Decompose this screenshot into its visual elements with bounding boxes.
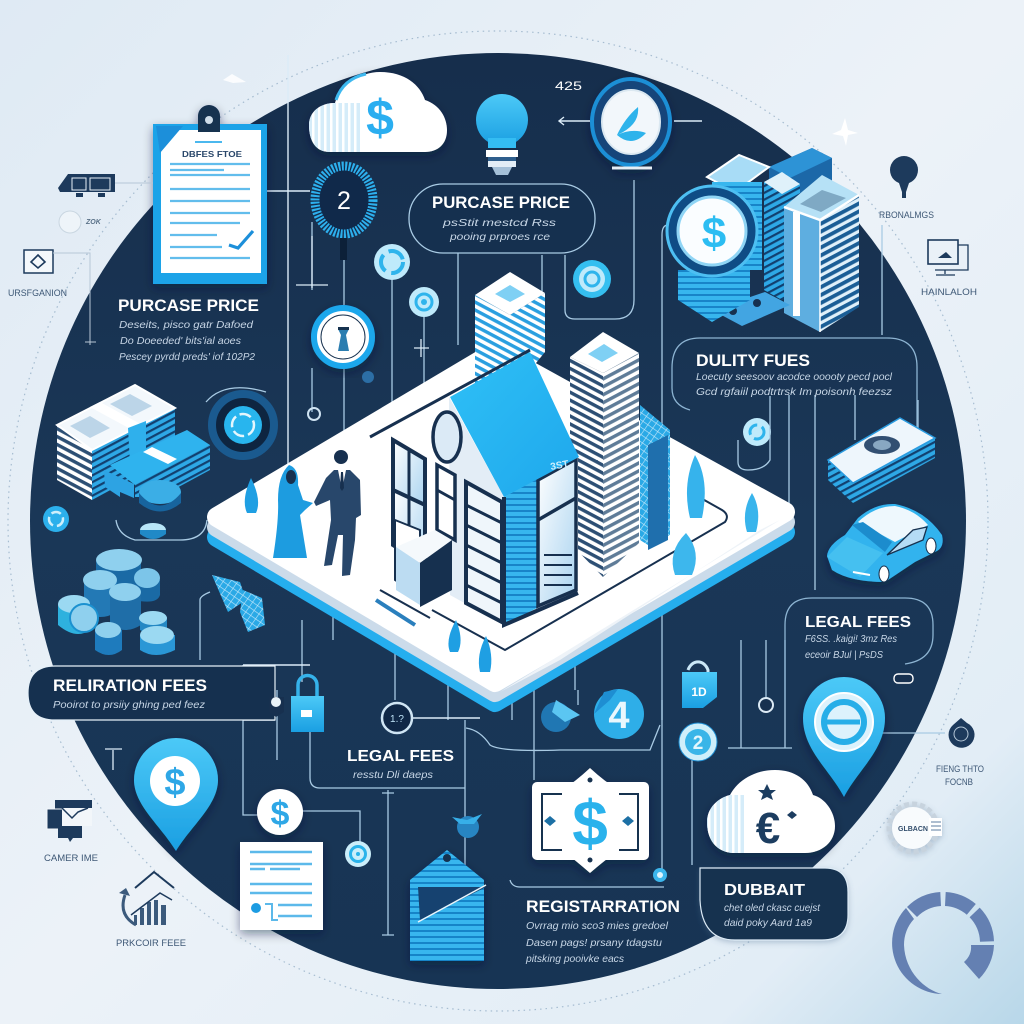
icon: dollar badge: $ [271, 795, 290, 833]
connector lines [116, 55, 945, 935]
text: dubai detail [724, 902, 821, 929]
icon: right clock tower cluster: $ [702, 209, 726, 258]
text: duty fees detail [696, 371, 893, 398]
text: clipboard title: DBFES FTOE [182, 149, 242, 159]
icon: blue map pin left with dollar [134, 738, 218, 851]
arrow: clock left [559, 117, 590, 125]
panel: duty fees [672, 338, 917, 436]
outside label: regionals: RBONALMGS [879, 210, 934, 221]
outside label: price fee: PRKCOIR FEEE [116, 938, 186, 949]
icon: padlock right: 1D [691, 685, 707, 699]
heading: purchase price left: PURCASE PRICE [118, 296, 259, 315]
outside icon: gear badge: GLBACN [898, 824, 928, 833]
icon: cloud with euro: € [756, 804, 780, 853]
icon: small capsule tag [894, 674, 913, 683]
text: relocation fees detail: Pooirot to prsiiy ghing ped feez [53, 699, 206, 711]
icon: woven tag [212, 575, 265, 632]
icon: ring target left [212, 394, 274, 456]
icon: teal badge far left [43, 506, 69, 532]
text: purchase price top detail: pooing prproes rce [449, 231, 550, 243]
heading: legal fees right: LEGAL FEES [805, 614, 911, 631]
icon: light bulb [476, 94, 528, 175]
text: dubai detail: chet oled ckasc cuejst [724, 902, 821, 914]
panel: dubai capsule [700, 868, 848, 940]
outside label: fieng thto focnb [936, 764, 984, 788]
text: legal fees bottom detail: resstu Dli daeps [353, 769, 434, 781]
people: man [314, 450, 361, 576]
icon: car [827, 504, 943, 582]
text: legal fees right detail: F6SS. .kaigi! 3mz Res [805, 633, 898, 645]
tower: front right [570, 332, 639, 577]
clock [667, 186, 757, 276]
label: 425: 425 [555, 79, 582, 93]
text: purchase price left detail [119, 319, 255, 363]
icon: target ring bottom [345, 841, 371, 867]
icon: orbit arc with sparkle [206, 388, 266, 402]
outside icon: dark bell pin [949, 718, 975, 748]
heading: duty fees: DULITY FUES [696, 351, 810, 370]
heading: relocation fees: RELIRATION FEES [53, 676, 207, 695]
icon: shield pin left [269, 697, 284, 717]
icon: banknote dollar center bottom [532, 768, 649, 873]
back building [707, 155, 769, 192]
icon: teal badge upper left [374, 244, 410, 280]
text: legal fees right detail [805, 633, 898, 661]
outside icon: plane left [223, 74, 246, 83]
platform base [217, 352, 785, 702]
icon: banknote stack right [828, 418, 935, 503]
outside label: camer ime: CAMER IME [44, 853, 98, 864]
icon: top clock [592, 79, 670, 168]
icon: padlock left [291, 676, 324, 732]
text: duty fees detail: Gcd rgfaiil podtrtrsk Im poisonh feezsz [696, 386, 893, 398]
line: clock right [674, 120, 702, 122]
icon: numbered ring 2 [315, 166, 373, 260]
icon: cloud with dollar [309, 72, 447, 152]
windows left upper [393, 440, 425, 565]
text: registration detail: Dasen pags! prsany tdagstu [526, 937, 662, 949]
icon: keyhole badge [314, 308, 372, 366]
icon: right clock tower cluster [667, 148, 859, 332]
base tiles [712, 292, 790, 326]
text: registration detail: Ovrrag mio sco3 mies gredoel [526, 920, 669, 932]
icon: cloud with dollar: $ [366, 90, 394, 146]
striped window block [466, 482, 502, 622]
gauge chart bottom right [892, 892, 994, 994]
icon: banknote dollar center bottom: $ [572, 787, 608, 859]
icon: number 2 badge [679, 723, 717, 761]
outside label: hainlaloh: HAINLALOH [921, 287, 977, 298]
heading: dubai: DUBBAIT [724, 882, 805, 899]
icon: small ring [759, 698, 773, 712]
mid tower [764, 172, 800, 300]
trees [245, 455, 758, 672]
text: legal fees right detail: eceoir BJul | PsDS [805, 649, 883, 661]
icon: numbered ring 2: 2 [337, 187, 351, 215]
icon: sparkle crosses [105, 236, 429, 770]
text: purchase price left detail: Pescey pyrdd preds' iof 102P2 [119, 351, 255, 363]
text: dubai detail: daid poky Aard 1a9 [724, 917, 812, 929]
outside label: organisation: URSFGANION [8, 288, 67, 299]
heading: legal fees bottom: LEGAL FEES [347, 748, 454, 765]
icon: blue map pin right [803, 677, 885, 797]
outside icon: globe and label: ZOK [85, 219, 102, 226]
roof tag: 3ST [550, 459, 570, 473]
tower: back left [475, 272, 545, 395]
striped base [678, 270, 750, 322]
icon: question badge: 1.? [390, 714, 404, 725]
outside label: fieng thto focnb: FOCNB [945, 777, 973, 788]
icon: cloud with euro [707, 770, 835, 853]
icon: blue tag folder [410, 850, 486, 961]
text: registration detail [525, 920, 669, 965]
text: registration detail: pitsking pooivke eacs [525, 953, 625, 965]
outside icon: bar chart tag left [47, 800, 92, 842]
panel: legal fees bottom [347, 748, 454, 781]
heading: purchase price top: PURCASE PRICE [432, 193, 570, 212]
outside label: fieng thto focnb: FIENG THTO [936, 764, 984, 775]
porch [395, 520, 420, 596]
icon: teal badge center right [573, 260, 611, 298]
icon: speaker badge [541, 700, 580, 732]
outside icon: globe and label [59, 211, 102, 233]
icon: coin stacks [58, 549, 175, 655]
tower: right small [640, 405, 670, 550]
text: purchase price left detail: Deseits, pisco gatr Dafoed [119, 319, 254, 331]
text: duty fees detail: Loecuty seesoov acodce ooooty pecd pocl [696, 371, 893, 383]
icon: teal badge right [743, 418, 771, 446]
icon: padlock right [682, 662, 717, 708]
outside icon: framed emblem [24, 250, 96, 345]
icon: question badge [382, 703, 412, 733]
icon: small node pins [308, 371, 374, 420]
outside icon: gear badge [889, 804, 942, 852]
panel: registration [525, 897, 680, 965]
icon: document bottom [240, 842, 323, 930]
outside icon: monitor [928, 240, 968, 275]
outside icon: dark pin right [890, 156, 918, 198]
text: purchase price left detail: Do Doeeded' bits'ial aoes [120, 335, 242, 347]
back block right [769, 148, 832, 250]
icon: small node near registration [653, 868, 667, 882]
outside icon: plane right [832, 118, 858, 146]
heading: registration: REGISTARRATION [526, 897, 680, 916]
icon: dollar badge [257, 789, 303, 835]
panel: clipboard document [153, 105, 267, 284]
house [370, 350, 579, 625]
people: woman [273, 465, 313, 558]
panel: legal fees right [785, 598, 933, 700]
icon: number 2 badge: 2 [693, 733, 703, 754]
icon: banknote stacks left [57, 385, 210, 539]
icon: blue bird pin [452, 814, 482, 838]
outside icon: house growth chart [119, 872, 174, 925]
outside icon: truck [58, 174, 153, 197]
icon: teal badge small [409, 287, 439, 317]
text: purchase price top detail [442, 217, 557, 243]
icon: number 4 badge: 4 [608, 695, 630, 737]
front tower [784, 207, 820, 332]
icon: blue map pin left with dollar: $ [164, 762, 186, 804]
icon: number 4 badge [594, 689, 644, 739]
panel: top purchase price capsule [409, 184, 595, 253]
text: purchase price top detail: psStit mestcd Rss [442, 217, 557, 229]
icon: hook line right [738, 396, 770, 470]
panel: relocation fees bar [28, 666, 275, 720]
